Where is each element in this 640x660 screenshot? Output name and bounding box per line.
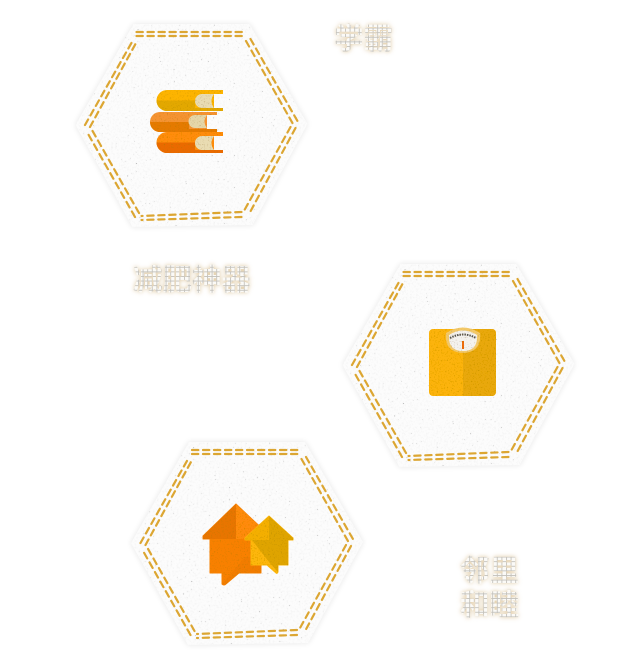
panel: scale hexagon xyxy=(342,264,574,467)
icon: neighbouring houses xyxy=(203,504,293,585)
icon: stack of books xyxy=(150,90,223,153)
label: good neighbours xyxy=(460,555,519,622)
icon: bathroom scale xyxy=(429,328,496,396)
panel: books hexagon xyxy=(76,24,308,227)
label: good neighbours: 和睦 xyxy=(460,589,519,622)
label: weight-loss tool: 减肥神器 xyxy=(133,264,252,297)
label: xue ba: 学霸 xyxy=(334,23,393,56)
label: good neighbours: 邻里 xyxy=(460,555,519,588)
panel: houses hexagon xyxy=(131,442,363,645)
